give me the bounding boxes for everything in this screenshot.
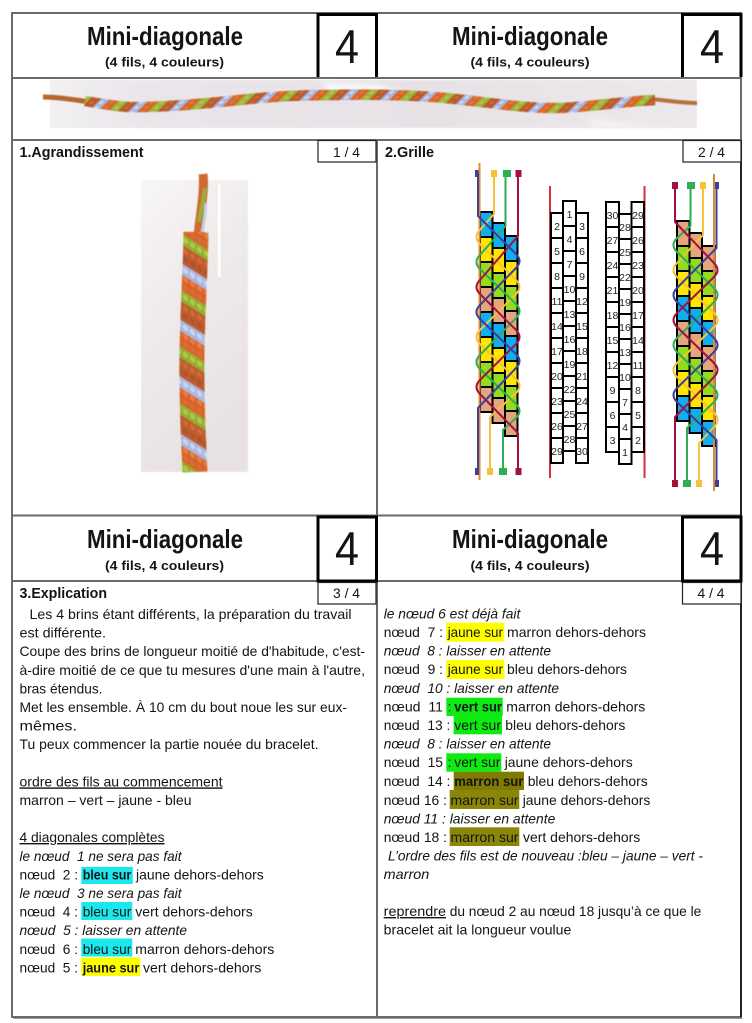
chart: right numbered grid: 22 bbox=[619, 272, 631, 284]
subtitle: (4 fils, 4 couleurs) bbox=[105, 54, 224, 70]
level box: 4 bbox=[335, 20, 359, 73]
text block: knot steps: nœud 7 : bbox=[384, 624, 443, 640]
chart: right numbered grid: 3 bbox=[610, 435, 616, 447]
level box bbox=[682, 14, 741, 77]
text block: repeat instruction bbox=[384, 903, 702, 938]
header: lower right bbox=[452, 517, 741, 581]
chart: right numbered grid: 16 bbox=[619, 322, 631, 334]
chart: left numbered grid: 11 bbox=[552, 296, 563, 308]
text block: knot steps: marron sur bbox=[454, 773, 524, 789]
text block: knot steps: jaune dehors-dehors bbox=[504, 754, 633, 770]
text block: thread order bbox=[20, 773, 223, 808]
text block: knot steps: vert dehors-dehors bbox=[143, 959, 261, 975]
page tag bbox=[318, 140, 376, 162]
chart: left numbered grid: 27 bbox=[576, 421, 588, 433]
level box bbox=[318, 14, 376, 77]
chart: right numbered grid: 7 bbox=[622, 397, 628, 409]
text block: thread order note: L’ordre des fils est de nouveau :bleu – jaune – vert - bbox=[388, 848, 703, 864]
text block: knot steps: vert sur bbox=[454, 754, 501, 770]
text block: knot steps: vert sur bbox=[454, 717, 501, 733]
text block: knot steps: marron sur bbox=[450, 792, 519, 808]
chart: left numbered grid: 30 bbox=[576, 446, 588, 458]
header: top right bbox=[452, 14, 741, 77]
text block: knot steps: jaune dehors-dehors bbox=[522, 792, 650, 808]
text block: knot steps: nœud 5 : laisser en attente bbox=[20, 922, 187, 938]
level box: 4 bbox=[700, 20, 724, 73]
chart: left numbered grid: 17 bbox=[551, 346, 563, 358]
text block: introduction: est différente. bbox=[20, 625, 106, 641]
chart: left numbered grid: 16 bbox=[564, 334, 575, 346]
text block: introduction: mêmes. bbox=[20, 718, 77, 734]
text block: knot steps: vert dehors-dehors bbox=[523, 829, 640, 845]
text block: repeat instruction: du nœud 2 au nœud 18 jusqu’à ce que le bbox=[450, 903, 702, 919]
page tag bbox=[682, 582, 741, 604]
chart: left numbered grid bbox=[550, 186, 588, 478]
page tag bbox=[683, 140, 741, 162]
chart: left numbered grid: 2 bbox=[554, 221, 560, 233]
chart: right numbered grid: 2 bbox=[635, 435, 641, 447]
text block: knot steps: jaune sur bbox=[82, 959, 140, 975]
chart: right numbered grid: 11 bbox=[633, 360, 644, 372]
chart: left numbered grid: 23 bbox=[551, 396, 563, 408]
chart: left numbered grid: 4 bbox=[567, 234, 573, 246]
chart: right numbered grid: 15 bbox=[607, 335, 618, 347]
text block: thread order: marron – vert – jaune - bleu bbox=[20, 792, 192, 808]
text block: repeat instruction: reprendre bbox=[384, 903, 446, 919]
chart: left numbered grid: 21 bbox=[576, 371, 588, 383]
panel: 3 Explication bbox=[20, 582, 376, 976]
chart: left numbered grid: 26 bbox=[551, 421, 563, 433]
text block: knot steps: marron dehors-dehors bbox=[506, 698, 645, 714]
title: Mini-diagonale bbox=[87, 524, 243, 554]
text block: knot steps: marron sur bbox=[450, 829, 519, 845]
photo: bracelet close-up bbox=[141, 174, 248, 472]
text block: knot steps: nœud 11 bbox=[384, 698, 443, 714]
chart: left numbered grid: 19 bbox=[564, 359, 575, 371]
chart: right weaving pattern bbox=[672, 174, 719, 491]
chart: left numbered grid: 3 bbox=[579, 221, 585, 233]
chart: right numbered grid: 23 bbox=[632, 260, 644, 272]
panel: 4 suite des noeuds bbox=[384, 582, 741, 938]
text block: thread order note bbox=[384, 848, 703, 882]
chart: left numbered grid: 20 bbox=[551, 371, 563, 383]
chart: right numbered grid: 4 bbox=[622, 422, 628, 434]
level box: 4 bbox=[335, 522, 359, 575]
text block: knot steps: nœud 2 : bbox=[20, 866, 78, 882]
text block: knot steps: nœud 10 : laisser en attente bbox=[384, 680, 559, 696]
subtitle: (4 fils, 4 couleurs) bbox=[470, 558, 590, 573]
chart: right numbered grid: 25 bbox=[619, 247, 631, 259]
text block: knot steps: jaune sur bbox=[447, 624, 503, 640]
text block: knot steps: jaune dehors-dehors bbox=[135, 866, 264, 882]
chart: right numbered grid: 18 bbox=[607, 310, 618, 322]
photo strip: bracelet bbox=[43, 80, 697, 128]
chart: right numbered grid: 26 bbox=[632, 235, 644, 247]
text block: introduction: à-dire moitié de ce que tu mesures d'une main à l'autre, bbox=[20, 662, 365, 678]
level box bbox=[682, 517, 741, 581]
text block: knot steps: nœud 13 : bbox=[384, 717, 450, 733]
level box: 4 bbox=[700, 522, 724, 575]
chart: right numbered grid: 13 bbox=[619, 347, 631, 359]
header: lower left bbox=[87, 517, 376, 581]
chart: right numbered grid: 9 bbox=[610, 385, 616, 397]
chart: right numbered grid: 5 bbox=[635, 410, 641, 422]
text block: knot steps: bleu dehors-dehors bbox=[505, 717, 625, 733]
chart: left numbered grid: 12 bbox=[576, 296, 588, 308]
text block: knot steps: nœud 9 : bbox=[384, 661, 443, 677]
text block: knot steps: bleu dehors-dehors bbox=[528, 773, 648, 789]
page tag: 3 / 4 bbox=[333, 585, 360, 601]
text block: knot steps: : bbox=[448, 698, 452, 714]
text block: thread order: ordre des fils au commencement bbox=[20, 773, 223, 789]
chart: left numbered grid: 8 bbox=[554, 271, 560, 283]
chart: left numbered grid: 1 bbox=[567, 209, 573, 221]
page tag: 2 / 4 bbox=[698, 144, 725, 160]
chart: left numbered grid: 7 bbox=[567, 259, 573, 271]
text block: knot steps: le nœud 6 est déjà fait bbox=[384, 605, 521, 621]
text block: knot steps: nœud 15 bbox=[384, 754, 443, 770]
subtitle: (4 fils, 4 couleurs) bbox=[470, 54, 590, 70]
level box bbox=[318, 517, 376, 581]
text block: knot steps: nœud 8 : laisser en attente bbox=[384, 736, 551, 752]
chart: right numbered grid: 19 bbox=[619, 297, 631, 309]
panel: 1 Agrandissement bbox=[20, 140, 376, 472]
text block: introduction: Tu peux commencer la partie nouée du bracelet. bbox=[20, 736, 318, 752]
text block: introduction: Les 4 brins étant différents, la préparation du travail bbox=[30, 606, 351, 622]
chart: left weaving pattern bbox=[475, 163, 522, 480]
chart: right numbered grid: 17 bbox=[632, 310, 644, 322]
chart: right numbered grid: 20 bbox=[632, 285, 644, 297]
text block: introduction: Coupe des brins de longueur moitié de d'habitude, c'est- bbox=[20, 643, 365, 659]
text block: knot steps: jaune sur bbox=[447, 661, 503, 677]
title: Mini-diagonale bbox=[452, 524, 608, 554]
text block: knot steps: nœud 4 : bbox=[20, 904, 78, 920]
text block: thread order note: marron bbox=[384, 866, 430, 882]
chart: left numbered grid: 29 bbox=[551, 446, 563, 458]
chart: left numbered grid: 5 bbox=[554, 246, 560, 258]
chart: left numbered grid: 24 bbox=[576, 396, 588, 408]
chart: right numbered grid: 1 bbox=[622, 447, 628, 459]
heading: 3.Explication bbox=[20, 586, 107, 602]
header: top left bbox=[87, 14, 376, 77]
text block: knot steps: vert sur bbox=[454, 698, 503, 714]
text block: knot steps: marron dehors-dehors bbox=[507, 624, 646, 640]
page tag bbox=[318, 582, 376, 604]
chart: left numbered grid: 13 bbox=[564, 309, 575, 321]
chart: right numbered grid: 14 bbox=[632, 335, 644, 347]
text block: knot steps: nœud 5 : bbox=[20, 959, 78, 975]
text block: knot steps: nœud 16 : bbox=[384, 792, 447, 808]
text block: knot steps: nœud 8 : laisser en attente bbox=[384, 643, 551, 659]
chart: left numbered grid: 9 bbox=[579, 271, 585, 283]
text block: knot steps: bleu sur bbox=[83, 941, 132, 957]
chart: right numbered grid bbox=[606, 186, 644, 478]
chart: left numbered grid: 28 bbox=[564, 434, 575, 446]
chart: right numbered grid: 10 bbox=[619, 372, 631, 384]
text block: knot steps: vert dehors-dehors bbox=[135, 904, 253, 920]
text block: knot steps: bleu sur bbox=[83, 866, 132, 882]
chart: right numbered grid: 30 bbox=[607, 210, 618, 222]
chart: right numbered grid: 12 bbox=[607, 360, 618, 372]
title: Mini-diagonale bbox=[87, 21, 243, 51]
chart: left numbered grid: 14 bbox=[551, 321, 563, 333]
text block: knot steps: marron dehors-dehors bbox=[135, 941, 274, 957]
subtitle: (4 fils, 4 couleurs) bbox=[105, 558, 224, 573]
chart: left numbered grid: 6 bbox=[579, 246, 585, 258]
page tag: 4 / 4 bbox=[698, 585, 725, 601]
heading: 1.Agrandissement bbox=[20, 145, 144, 161]
text block: knot steps: nœud 11 : laisser en attente bbox=[384, 810, 555, 826]
text block: knot steps: 4 diagonales complètes bbox=[20, 829, 164, 845]
chart: left numbered grid: 10 bbox=[564, 284, 575, 296]
chart: right numbered grid: 21 bbox=[607, 285, 618, 297]
page tag: 1 / 4 bbox=[333, 144, 360, 160]
text block: knot steps: le nœud 1 ne sera pas fait bbox=[20, 848, 183, 864]
chart: left numbered grid: 22 bbox=[564, 384, 575, 396]
text block: knot steps: nœud 6 : bbox=[20, 941, 78, 957]
text block: introduction: bras étendus. bbox=[20, 680, 102, 696]
chart: left numbered grid: 15 bbox=[576, 321, 588, 333]
text block: knot steps: le nœud 3 ne sera pas fait bbox=[20, 885, 183, 901]
chart: right numbered grid: 29 bbox=[632, 210, 644, 222]
chart: right numbered grid: 24 bbox=[607, 260, 618, 272]
title: Mini-diagonale bbox=[452, 21, 608, 51]
panel: 2 Grille bbox=[385, 140, 741, 491]
text block: knot steps: : bbox=[448, 754, 452, 770]
text block: knot steps: nœud 14 : bbox=[384, 773, 450, 789]
chart: right numbered grid: 8 bbox=[635, 385, 641, 397]
text block: knot steps: bleu dehors-dehors bbox=[507, 661, 627, 677]
text block: knot steps: bleu sur bbox=[83, 904, 132, 920]
chart: left numbered grid: 18 bbox=[576, 346, 588, 358]
text block: repeat instruction: bracelet ait la longueur voulue bbox=[384, 922, 572, 938]
chart: right numbered grid: 28 bbox=[619, 222, 631, 234]
text block: knot steps bbox=[20, 829, 274, 976]
heading: 2.Grille bbox=[385, 145, 434, 161]
text block: introduction: Met les ensemble. À 10 cm du bout noue les sur eux- bbox=[20, 699, 347, 715]
chart: right numbered grid: 6 bbox=[610, 410, 616, 422]
chart: right numbered grid: 27 bbox=[607, 235, 618, 247]
text block: knot steps bbox=[384, 605, 650, 846]
chart: left numbered grid: 25 bbox=[564, 409, 575, 421]
text block: introduction bbox=[20, 606, 365, 752]
text block: knot steps: nœud 18 : bbox=[384, 829, 447, 845]
